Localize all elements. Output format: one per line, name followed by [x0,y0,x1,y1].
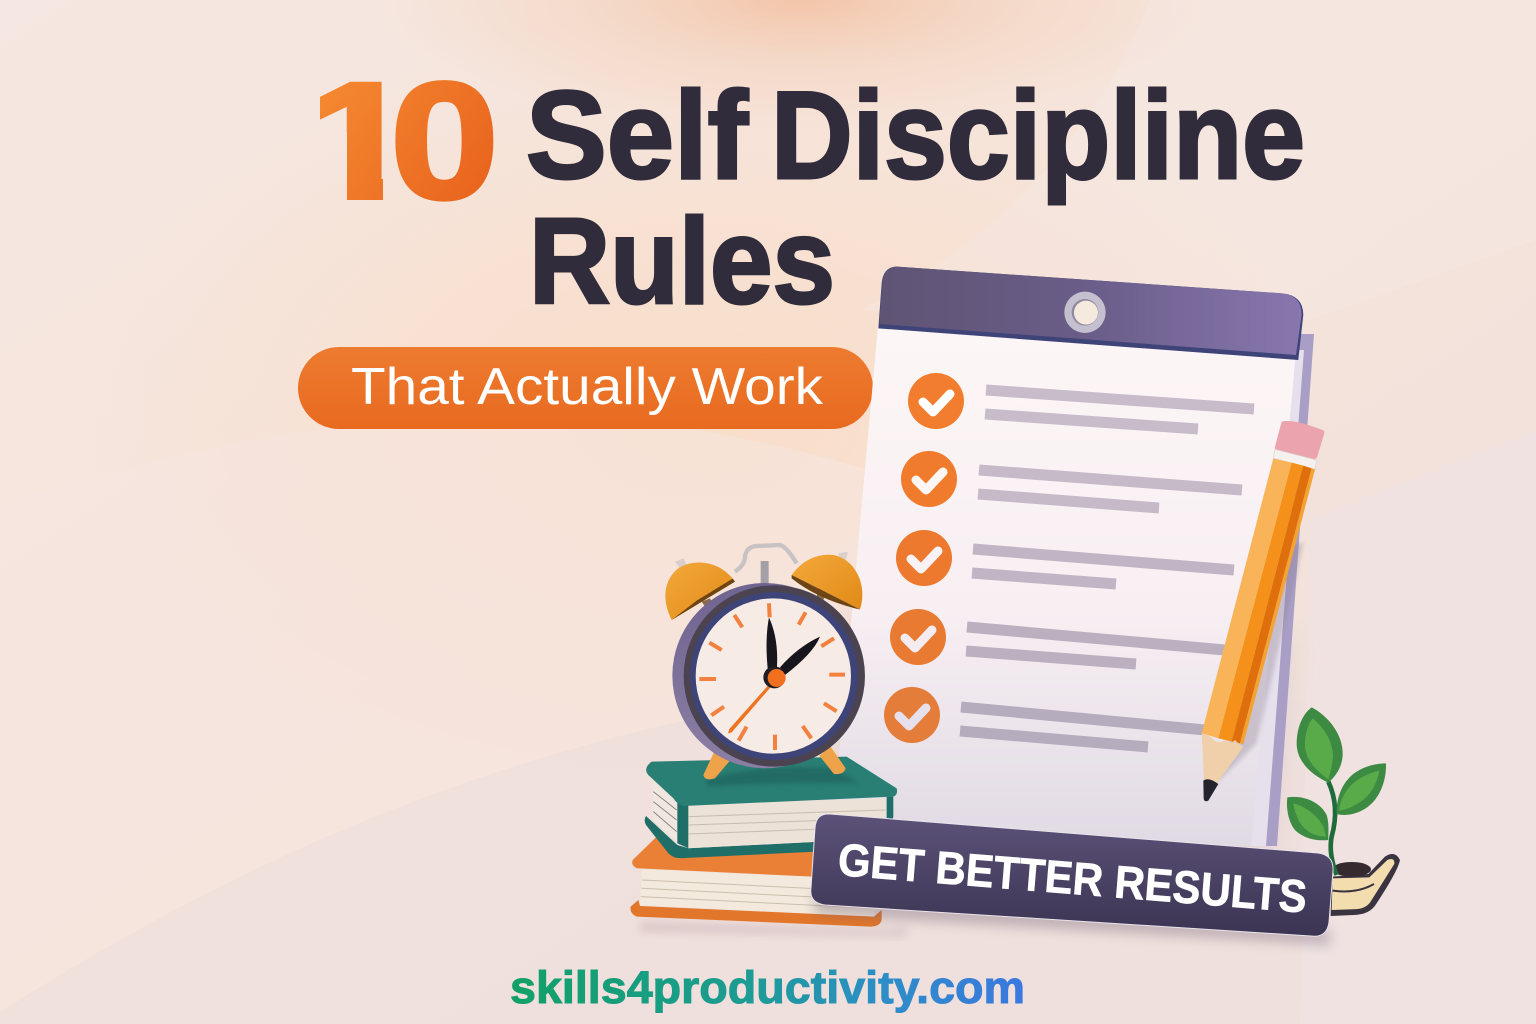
text lines 5 [960,707,1205,747]
title number 10 [320,80,494,202]
icon: pencil [1202,421,1324,801]
pencil body [1202,458,1292,738]
back cover [645,797,893,858]
green book [645,757,897,858]
pencil wood tip [1202,733,1243,783]
title number 10: 1 [299,49,419,234]
check 3 [896,530,952,586]
clock ticks [699,603,845,750]
leaf top [1297,707,1343,783]
page edge front [688,798,886,848]
clock hands [728,678,778,733]
clock face [696,598,851,754]
icon: plant [1287,707,1400,916]
subtitle pill [298,347,873,429]
book shadow [640,922,907,937]
badge text: GET BETTER RESULTS [836,833,1309,923]
check 2 [901,451,957,507]
stem [1328,782,1337,875]
back pages [1250,334,1314,846]
spine [677,802,688,848]
clock body [672,583,858,768]
text lines 1 [985,390,1254,429]
left bell [665,558,735,620]
pencil ferrule [1273,449,1317,469]
pencil lead [1203,779,1218,801]
badge plate [811,814,1333,936]
green book cover [646,757,897,806]
title line 1: Self [526,67,749,205]
grommet [1064,292,1106,333]
page edge side [653,782,677,842]
badge shadow [815,890,1330,945]
check 5 [884,687,940,743]
clock handle [735,545,797,572]
leaf right [1337,763,1386,815]
paper sheet [832,326,1296,846]
header band [878,267,1303,360]
text lines 2 [978,470,1242,508]
pencil eraser [1275,421,1324,460]
website url: skills4productivity.com [510,962,1025,1013]
check 1 [908,373,964,429]
icon: book stack [630,757,907,937]
text lines 3 [972,549,1234,584]
text lines 4 [966,627,1225,664]
icon: alarm clock [665,545,865,779]
pencil shadow [1217,543,1303,783]
title [320,80,1302,306]
checklist notepad [830,267,1314,860]
right bell [792,552,862,609]
title line 2: Rules [529,193,835,329]
title line 1: Discipline [771,67,1305,205]
orange book [630,837,882,927]
title number 10: 0 [390,49,499,234]
pot [1331,854,1400,916]
badge [811,814,1333,945]
clock feet [703,750,730,779]
subtitle pill: That Actually Work [351,358,824,416]
leaf left [1287,797,1329,840]
check 4 [890,609,946,665]
title line 1 [526,67,1305,205]
paper shadow [830,600,1290,860]
